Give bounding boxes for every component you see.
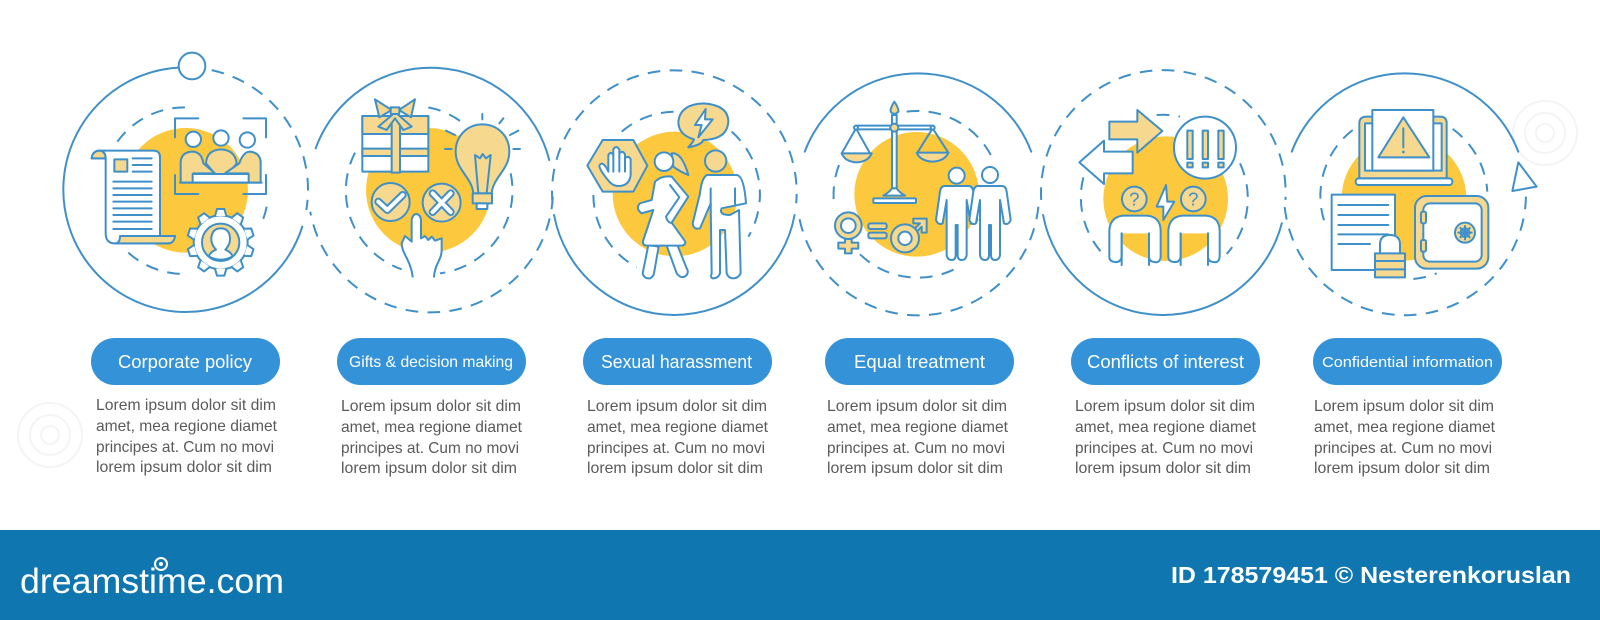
text block: gifts and decision making: amet, mea regione diamet [341,419,523,436]
text block: equal treatment: principes at. Cum no movi [827,440,1005,457]
text block: corporate policy: lorem ipsum dolor sit dim [96,459,272,476]
text block: gifts and decision making: lorem ipsum dolor sit dim [341,460,517,477]
icon: balance scales [842,102,948,203]
text block: equal treatment: amet, mea regione diamet [827,419,1009,436]
heading pill: Conflicts of interest [1071,338,1260,385]
text block: equal treatment: Lorem ipsum dolor sit dim [827,398,1007,415]
circle diagram: gifts and decision making [310,68,553,312]
icon: meeting of three people [175,118,266,194]
text block: gifts and decision making: principes at. Cum no movi [341,440,519,457]
text block: equal treatment: lorem ipsum dolor sit dim [827,460,1003,477]
heading pill: Conflicts of interest: Conflicts of interest [1087,352,1244,372]
icon: exclamation marks [1174,117,1236,179]
text block: sexual harassment: principes at. Cum no movi [587,440,765,457]
text block: confidential information: amet, mea regione diamet [1314,419,1496,436]
icon: two people in conflict: ? [1129,189,1140,210]
text block: sexual harassment [587,398,769,477]
icon: light bulb [445,114,520,209]
icon: stop hand hexagon [587,140,647,192]
icon: pointing hand [402,214,442,277]
circle diagram: sexual harassment [552,70,797,315]
icon: opposing arrows [1079,110,1162,184]
text block: sexual harassment: Lorem ipsum dolor sit dim [587,398,767,415]
text block: corporate policy [96,397,278,476]
icon: female equals male [835,212,927,253]
heading pill: Sexual harassment [583,338,772,385]
heading pill: Corporate policy [91,338,280,385]
text block: conflicts of interest: principes at. Cum no movi [1075,440,1253,457]
text block: gifts and decision making [341,398,523,477]
heading pill: Confidential information: Confidential information [1322,354,1493,371]
heading pill: Sexual harassment: Sexual harassment [601,352,752,372]
heading pill: Corporate policy: Corporate policy [118,352,252,372]
icon: check mark button [372,183,410,221]
circle diagram: confidential information [1285,73,1537,315]
circle diagram: equal treatment [799,73,1038,315]
panel: confidential information [1285,73,1537,477]
icon: two people in conflict [1109,185,1220,265]
icon: gear with user [187,209,254,276]
panel: equal treatment [799,73,1038,477]
icon: laptop with warning [1356,110,1452,185]
icon: gift box [362,99,428,173]
footer banner [0,530,1600,620]
icon: two people in conflict: ? [1188,189,1199,210]
marker: start circle [179,53,205,79]
icon: cross button [423,184,461,222]
icon: speech bubble with lightning [678,103,728,147]
text block: conflicts of interest: Lorem ipsum dolor sit dim [1075,398,1255,415]
circle diagram: conflicts of interest [1041,70,1286,315]
text block: gifts and decision making: Lorem ipsum dolor sit dim [341,398,521,415]
text block: equal treatment [827,398,1009,477]
footer credit: ID 178579451 © Nesterenkoruslan [1171,562,1571,588]
icon: safe [1415,196,1488,269]
text block: confidential information: Lorem ipsum dolor sit dim [1314,398,1494,415]
text block: corporate policy: Lorem ipsum dolor sit dim [96,397,276,414]
icon: man figure [693,150,746,278]
text block: confidential information [1314,398,1496,477]
text block: sexual harassment: lorem ipsum dolor sit dim [587,460,763,477]
panel: corporate policy [63,53,308,476]
text block: corporate policy: amet, mea regione diamet [96,418,278,435]
text block: conflicts of interest: amet, mea regione diamet [1075,419,1257,436]
text block: conflicts of interest [1075,398,1257,477]
text block: conflicts of interest: lorem ipsum dolor sit dim [1075,460,1251,477]
text block: corporate policy: principes at. Cum no movi [96,439,274,456]
heading pill: Equal treatment [825,338,1014,385]
text block: sexual harassment: amet, mea regione diamet [587,419,769,436]
panel: conflicts of interest [1041,70,1286,477]
heading pill: Confidential information [1313,338,1502,385]
icon: locked document [1332,195,1405,277]
icon: policy document scroll [92,151,175,243]
footer logo: dreamstime.com [20,562,284,601]
text block: confidential information: principes at. Cum no movi [1314,440,1492,457]
text block: confidential information: lorem ipsum dolor sit dim [1314,460,1490,477]
heading pill: Gifts & decision making: Gifts & decision making [349,354,513,371]
circle diagram: corporate policy [63,53,308,312]
arrow: end triangle [1512,162,1537,191]
heading pill: Gifts & decision making [337,338,526,385]
panel: sexual harassment [552,70,797,477]
icon: two men [936,167,1011,260]
heading pill: Equal treatment: Equal treatment [854,352,985,372]
icon: woman figure [638,152,688,278]
panel: gifts and decision making [310,68,553,477]
